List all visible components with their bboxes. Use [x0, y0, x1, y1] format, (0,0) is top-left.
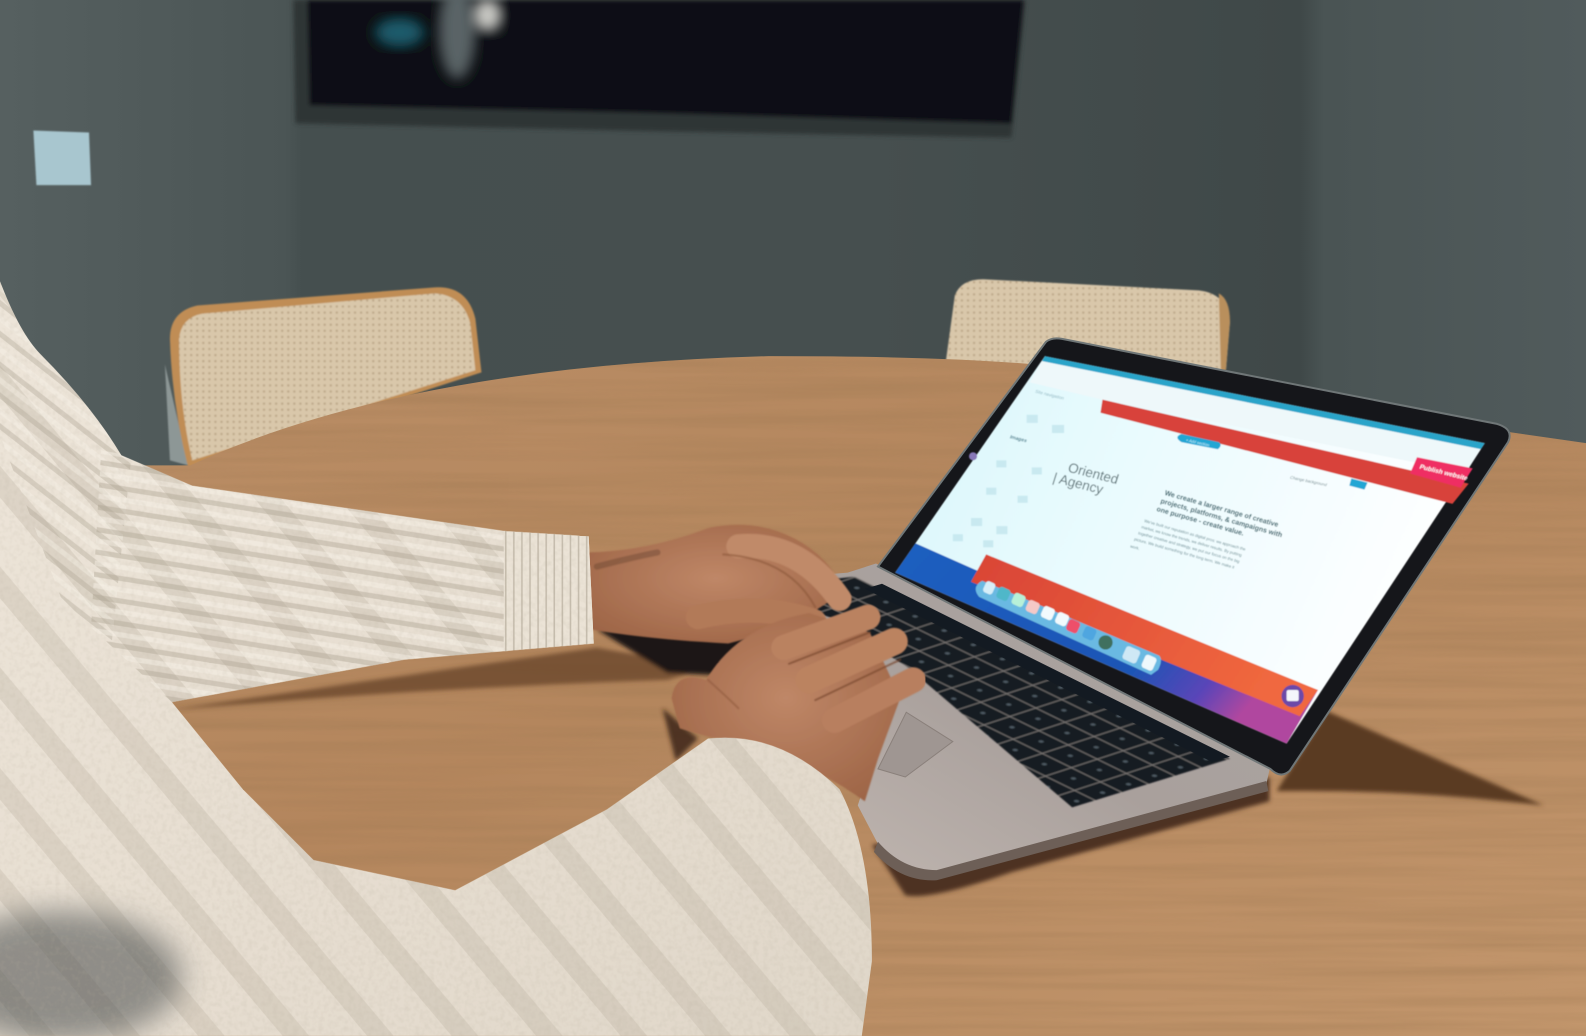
blue section tag	[1177, 434, 1221, 449]
top red banner	[1100, 400, 1469, 504]
laptop front edge	[874, 781, 1268, 880]
sweater: arm and torso	[0, 273, 880, 1036]
wall light switch	[33, 131, 91, 185]
laptop	[738, 338, 1510, 880]
laptop lid bezel	[878, 338, 1510, 775]
sidebar avatar	[969, 452, 977, 460]
lower hand	[672, 613, 913, 801]
touch bar	[865, 584, 1230, 762]
page body paragraph: market, we know the trends, we deliver results. By putting	[1141, 524, 1243, 558]
sidebar items: Site navigation	[1034, 389, 1065, 401]
lower red band	[971, 554, 1318, 716]
page body paragraph: We've built our reputation as digital pros: we approach the	[1144, 518, 1247, 552]
page body paragraph	[1130, 518, 1247, 570]
page body paragraph: work.	[1130, 544, 1140, 551]
template label: Change background	[1289, 475, 1329, 487]
sidebar items	[953, 389, 1065, 547]
sidebar items: Images	[1009, 434, 1028, 444]
wallpaper strip	[895, 543, 1318, 744]
laptop shadow on the table	[167, 629, 1544, 896]
screen display	[895, 356, 1485, 744]
screen page background	[895, 356, 1485, 744]
page title	[1051, 460, 1120, 497]
left chair	[165, 287, 481, 467]
dock	[976, 580, 1161, 675]
menu bar	[1042, 356, 1485, 449]
laptop base	[738, 564, 1271, 878]
page heading paragraph: We create a larger range of creative	[1164, 490, 1279, 529]
publish button	[1410, 457, 1473, 488]
page body paragraph: together creative and strategy, we put our focus on the big	[1138, 530, 1241, 564]
wooden table top	[0, 344, 1586, 1036]
page heading paragraph: projects, platforms, & campaigns with	[1160, 498, 1283, 539]
publish button: Publish website	[1418, 464, 1469, 482]
wall-mounted TV screen	[293, 0, 1026, 138]
blue section tag: + Add section	[1185, 437, 1210, 447]
page title: | Agency	[1051, 470, 1105, 497]
page title: Oriented	[1066, 460, 1120, 487]
keyboard	[743, 577, 1230, 807]
small blue tag	[1349, 479, 1368, 490]
editor toolbar	[1030, 361, 1481, 471]
trackpad corner	[878, 712, 953, 777]
right chair	[946, 279, 1230, 374]
MacBook Pro label: MacBook Pro	[1024, 630, 1077, 663]
upper hand	[587, 525, 845, 643]
page heading paragraph: one purpose - create value.	[1156, 506, 1245, 538]
page body paragraph: picture. We build something for the long term. We make it	[1134, 536, 1236, 570]
chat bubble button	[1282, 685, 1304, 707]
